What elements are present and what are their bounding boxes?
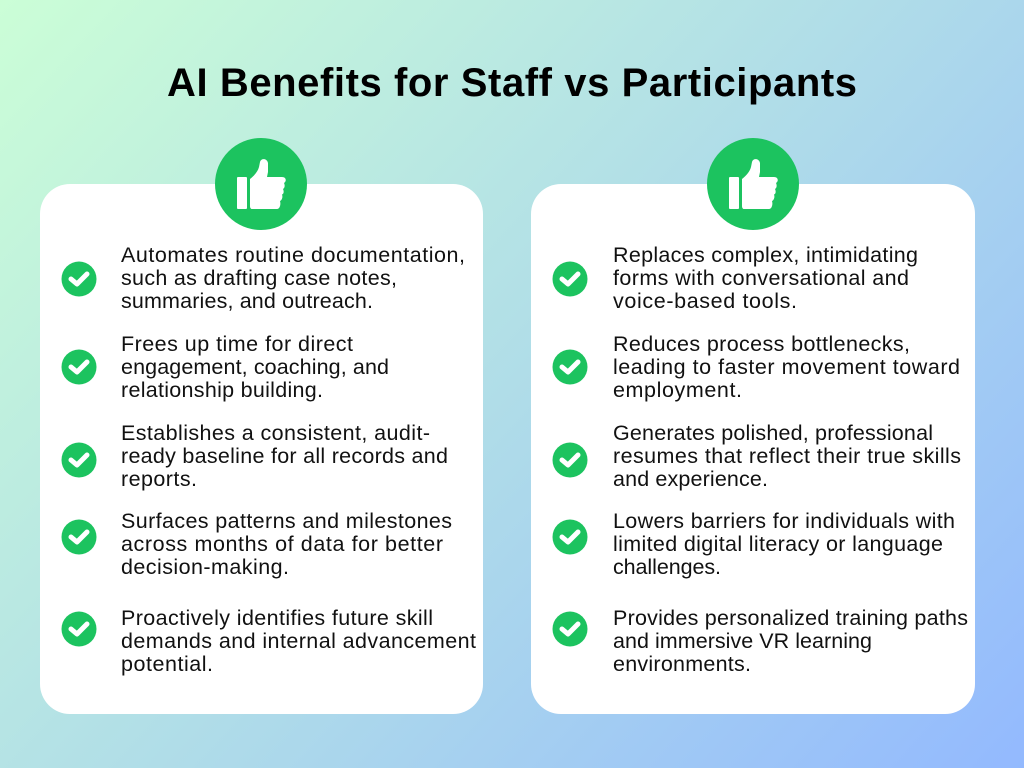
text: staff item 5: Proactively identifies future skill — [121, 606, 433, 630]
text: participants item 4 — [613, 509, 955, 579]
text: participants item 5: Provides personalized training paths — [613, 606, 968, 630]
icon: staff thumbs up — [215, 138, 307, 230]
text: staff item 1: such as drafting case notes, — [121, 266, 397, 290]
text: participants item 2: Reduces process bottlenecks, — [613, 332, 910, 356]
text: participants item 2: employment. — [613, 378, 742, 402]
text: staff item 1: Automates routine documentation, — [121, 243, 465, 267]
text: staff item 2: engagement, coaching, and — [121, 355, 389, 379]
text: staff item 3: Establishes a consistent, audit- — [121, 421, 430, 445]
text: staff item 2: relationship building. — [121, 378, 323, 402]
check icon: participants item 1 — [552, 262, 588, 296]
check icon: participants item 2 — [552, 350, 588, 384]
text: staff item 3: ready baseline for all records and — [121, 444, 448, 468]
text: staff item 4: decision-making. — [121, 555, 289, 579]
check icon: participants item 5 — [552, 612, 588, 646]
text: participants item 1: voice-based tools. — [613, 289, 797, 313]
text: participants item 3: Generates polished, professional — [613, 421, 933, 445]
text: staff item 2 — [121, 332, 389, 402]
check icon: participants item 4 — [552, 520, 588, 554]
text: participants item 4: Lowers barriers for individuals with — [613, 509, 955, 533]
text: participants item 1: Replaces complex, intimidating — [613, 243, 918, 267]
icon: participants thumbs up — [707, 138, 799, 230]
check icon: staff item 1 — [62, 262, 96, 296]
text: participants item 4: limited digital literacy or language — [613, 532, 943, 556]
text: staff item 5: demands and internal advancement — [121, 629, 476, 653]
text: participants item 5: environments. — [613, 652, 751, 676]
text: staff item 2: Frees up time for direct — [121, 332, 353, 356]
panel background: staff — [40, 184, 483, 714]
text: staff item 5 — [121, 606, 476, 676]
check icon: staff item 3 — [62, 442, 96, 478]
text: staff item 3 — [121, 421, 448, 491]
text: participants item 1 — [613, 243, 918, 313]
check icon: staff item 2 — [62, 350, 96, 384]
text: staff item 1: summaries, and outreach. — [121, 289, 373, 313]
text: participants item 3 — [613, 421, 961, 491]
panel: staff benefits — [40, 138, 483, 714]
text: staff item 4: across months of data for better — [121, 532, 443, 556]
check icon: staff item 4 — [62, 520, 96, 554]
panel background: participants — [531, 184, 975, 714]
text: participants item 4: challenges. — [613, 555, 721, 579]
text: participants item 1: forms with conversational and — [613, 266, 909, 290]
text: participants item 2 — [613, 332, 960, 402]
text: staff item 5: potential. — [121, 652, 213, 676]
text: staff item 4 — [121, 509, 452, 579]
panel: participant benefits — [531, 138, 975, 714]
text: participants item 3: resumes that reflect their true skills — [613, 444, 961, 468]
title: AI Benefits for Staff vs Participants — [167, 61, 857, 105]
text: staff item 3: reports. — [121, 467, 197, 491]
text: participants item 5 — [613, 606, 968, 676]
text: participants item 2: leading to faster movement toward — [613, 355, 960, 379]
text: staff item 1 — [121, 243, 465, 313]
check icon: participants item 3 — [552, 442, 588, 478]
text: participants item 3: and experience. — [613, 467, 768, 491]
text: participants item 5: and immersive VR learning — [613, 629, 872, 653]
text: staff item 4: Surfaces patterns and milestones — [121, 509, 452, 533]
check icon: staff item 5 — [62, 612, 96, 646]
